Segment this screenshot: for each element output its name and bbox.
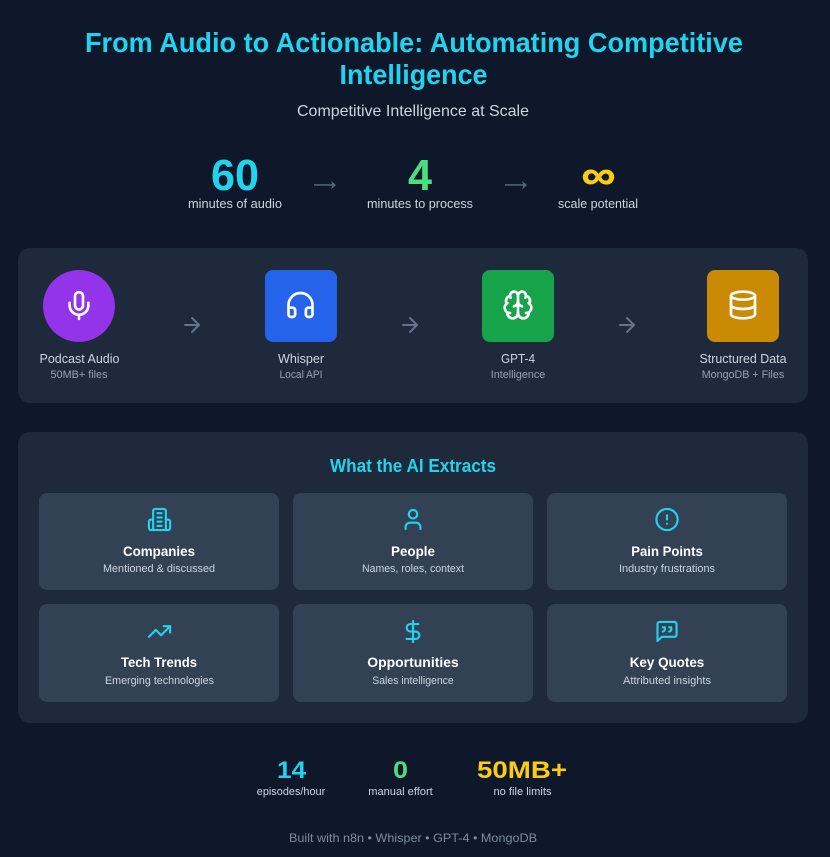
stat: episodes per hour: 14 <box>277 757 307 784</box>
card: pain points: Pain Points <box>631 543 703 559</box>
stat: 60 minutes of audio <box>188 151 282 211</box>
card: companies: Companies <box>123 543 195 559</box>
stat: file size: no file limits <box>494 786 552 798</box>
card: people: People <box>391 543 435 559</box>
step: gpt-4 <box>482 270 554 381</box>
step: structured data: MongoDB + Files <box>702 369 785 381</box>
card: opportunities: Opportunities <box>367 654 459 670</box>
step: structured data: Structured Data <box>700 351 787 366</box>
stat: manual effort: manual effort <box>368 786 433 798</box>
card: people <box>293 493 533 590</box>
stat: 60 minutes of audio: minutes of audio <box>188 196 282 211</box>
card: pain points <box>547 493 787 590</box>
card: key quotes: Key Quotes <box>630 654 704 670</box>
card: key quotes <box>547 604 787 702</box>
step: podcast audio: Podcast Audio <box>40 351 120 366</box>
subtitle: Competitive Intelligence at Scale <box>297 103 529 120</box>
step: structured data <box>700 270 787 381</box>
title: From Audio to Actionable: Automating Competitive <box>85 27 743 58</box>
card: opportunities <box>293 604 533 702</box>
step: gpt-4: GPT-4 <box>501 351 535 366</box>
stat: file size <box>477 757 567 798</box>
title: Intelligence <box>340 59 488 90</box>
stat: 4 minutes to process <box>367 151 473 211</box>
stat: 60 minutes of audio: 60 <box>211 151 259 200</box>
card: people: Names, roles, context <box>362 563 464 575</box>
stat: file size: 50MB+ <box>477 757 567 784</box>
card: pain points: Industry frustrations <box>619 563 715 575</box>
card: tech trends: Tech Trends <box>121 654 197 670</box>
step: podcast audio <box>40 270 120 381</box>
step: gpt-4: Intelligence <box>491 369 545 381</box>
card: key quotes: Attributed insights <box>623 675 712 687</box>
stat: manual effort <box>368 757 433 798</box>
stat: 4 minutes to process: minutes to process <box>367 196 473 211</box>
panel: what the AI extracts <box>18 432 808 723</box>
card: companies <box>39 493 279 590</box>
step: podcast audio: 50MB+ files <box>50 369 108 381</box>
stat: infinite scale potential: scale potential <box>558 196 638 211</box>
step: whisper: Whisper <box>278 351 325 366</box>
stat: 4 minutes to process: 4 <box>408 151 433 200</box>
card: tech trends <box>39 604 279 702</box>
card: opportunities: Sales intelligence <box>372 675 454 687</box>
stat: episodes per hour: episodes/hour <box>257 786 326 798</box>
card: companies: Mentioned & discussed <box>103 563 215 575</box>
stat: infinite scale potential: ∞ <box>582 154 616 198</box>
footer: Built with n8n • Whisper • GPT-4 • MongoDB <box>289 831 537 845</box>
stat: infinite scale potential <box>558 154 638 211</box>
heading: What the AI Extracts <box>330 456 496 476</box>
card: tech trends: Emerging technologies <box>105 675 214 687</box>
panel: pipeline <box>18 248 808 403</box>
step: whisper: Local API <box>280 369 322 381</box>
arrow: 60 to 4 <box>314 181 336 190</box>
arrow: 4 to infinity <box>505 181 527 190</box>
arrow: audio to whisper <box>185 318 199 332</box>
stat: episodes per hour <box>257 757 326 798</box>
stat: manual effort: 0 <box>393 757 408 784</box>
step: whisper <box>265 270 337 381</box>
arrow: gpt to data <box>620 318 634 332</box>
title <box>85 27 743 90</box>
arrow: whisper to gpt <box>403 318 417 332</box>
